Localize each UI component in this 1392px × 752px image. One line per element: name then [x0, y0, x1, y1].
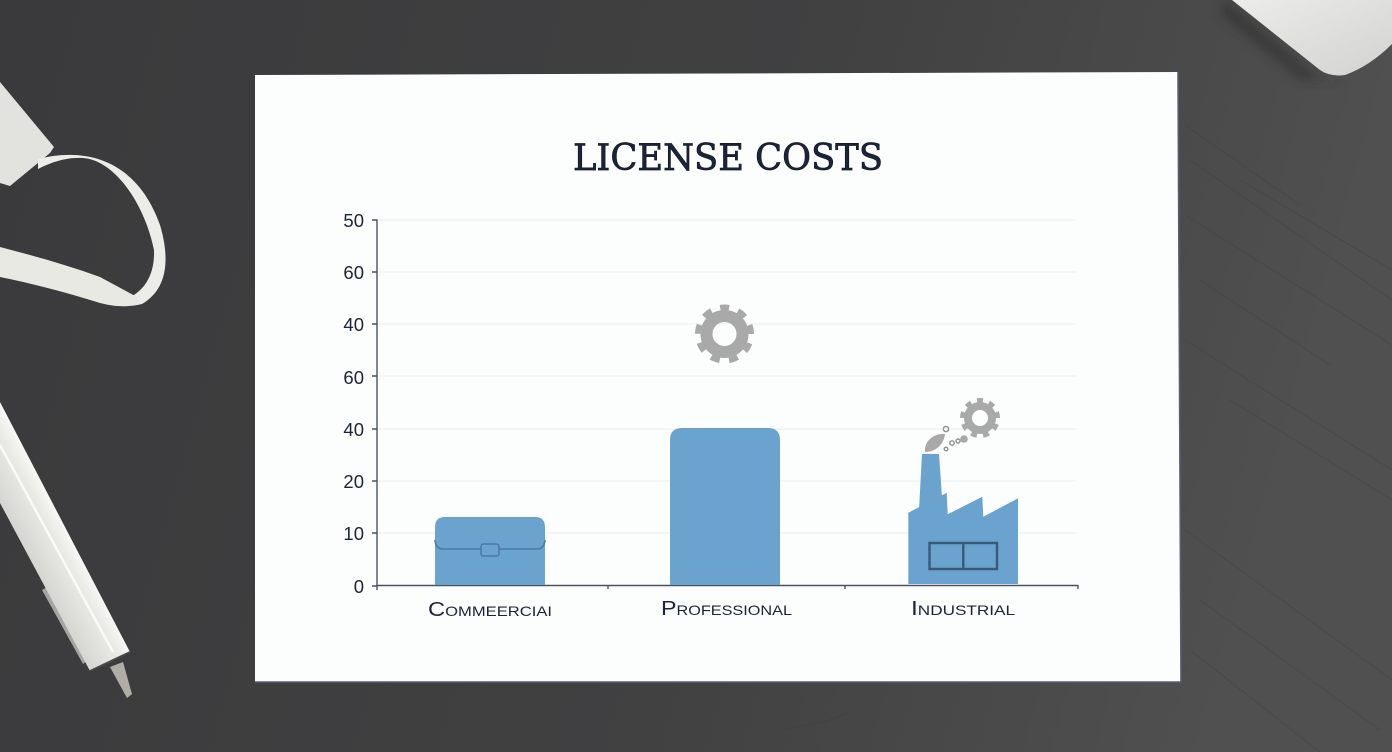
strap band — [0, 247, 142, 306]
axes — [372, 220, 1078, 590]
y axis labels: 40 — [343, 314, 364, 335]
lanyard strap — [0, 82, 166, 306]
grid lines — [377, 220, 1076, 533]
chimney — [919, 454, 942, 510]
y axis labels: 60 — [343, 367, 364, 388]
icon: small gear — [962, 400, 998, 436]
mug shadow — [1220, 0, 1345, 82]
bar: commercial briefcase — [435, 517, 545, 585]
y axis labels: 10 — [343, 523, 364, 544]
title: LICENSE COSTS — [573, 138, 883, 179]
icon: factory bar — [908, 454, 1018, 584]
icon: large gear — [698, 308, 750, 360]
category labels: Commeerciai — [428, 599, 552, 621]
category labels: Industrial — [911, 598, 1015, 620]
factory window — [930, 543, 997, 569]
icon: smoke — [925, 426, 968, 452]
y axis labels: 60 — [343, 262, 364, 283]
pen — [0, 402, 132, 698]
category labels: Professional — [661, 598, 792, 620]
y axis labels: 20 — [343, 471, 364, 492]
mug at top right — [1232, 0, 1392, 75]
bar: professional — [670, 428, 780, 585]
y axis labels: 50 — [343, 210, 364, 231]
category labels — [428, 598, 1015, 621]
y axis labels — [343, 210, 364, 597]
pen nib — [110, 662, 132, 698]
factory body — [908, 493, 1018, 584]
paper sheet — [255, 72, 1181, 682]
bar chart — [343, 210, 1078, 621]
pen clip — [42, 587, 88, 664]
y axis labels: 0 — [354, 576, 364, 597]
y axis labels: 40 — [343, 419, 364, 440]
strap loop — [38, 155, 166, 304]
pen body — [0, 402, 130, 671]
strap handle — [0, 82, 54, 186]
